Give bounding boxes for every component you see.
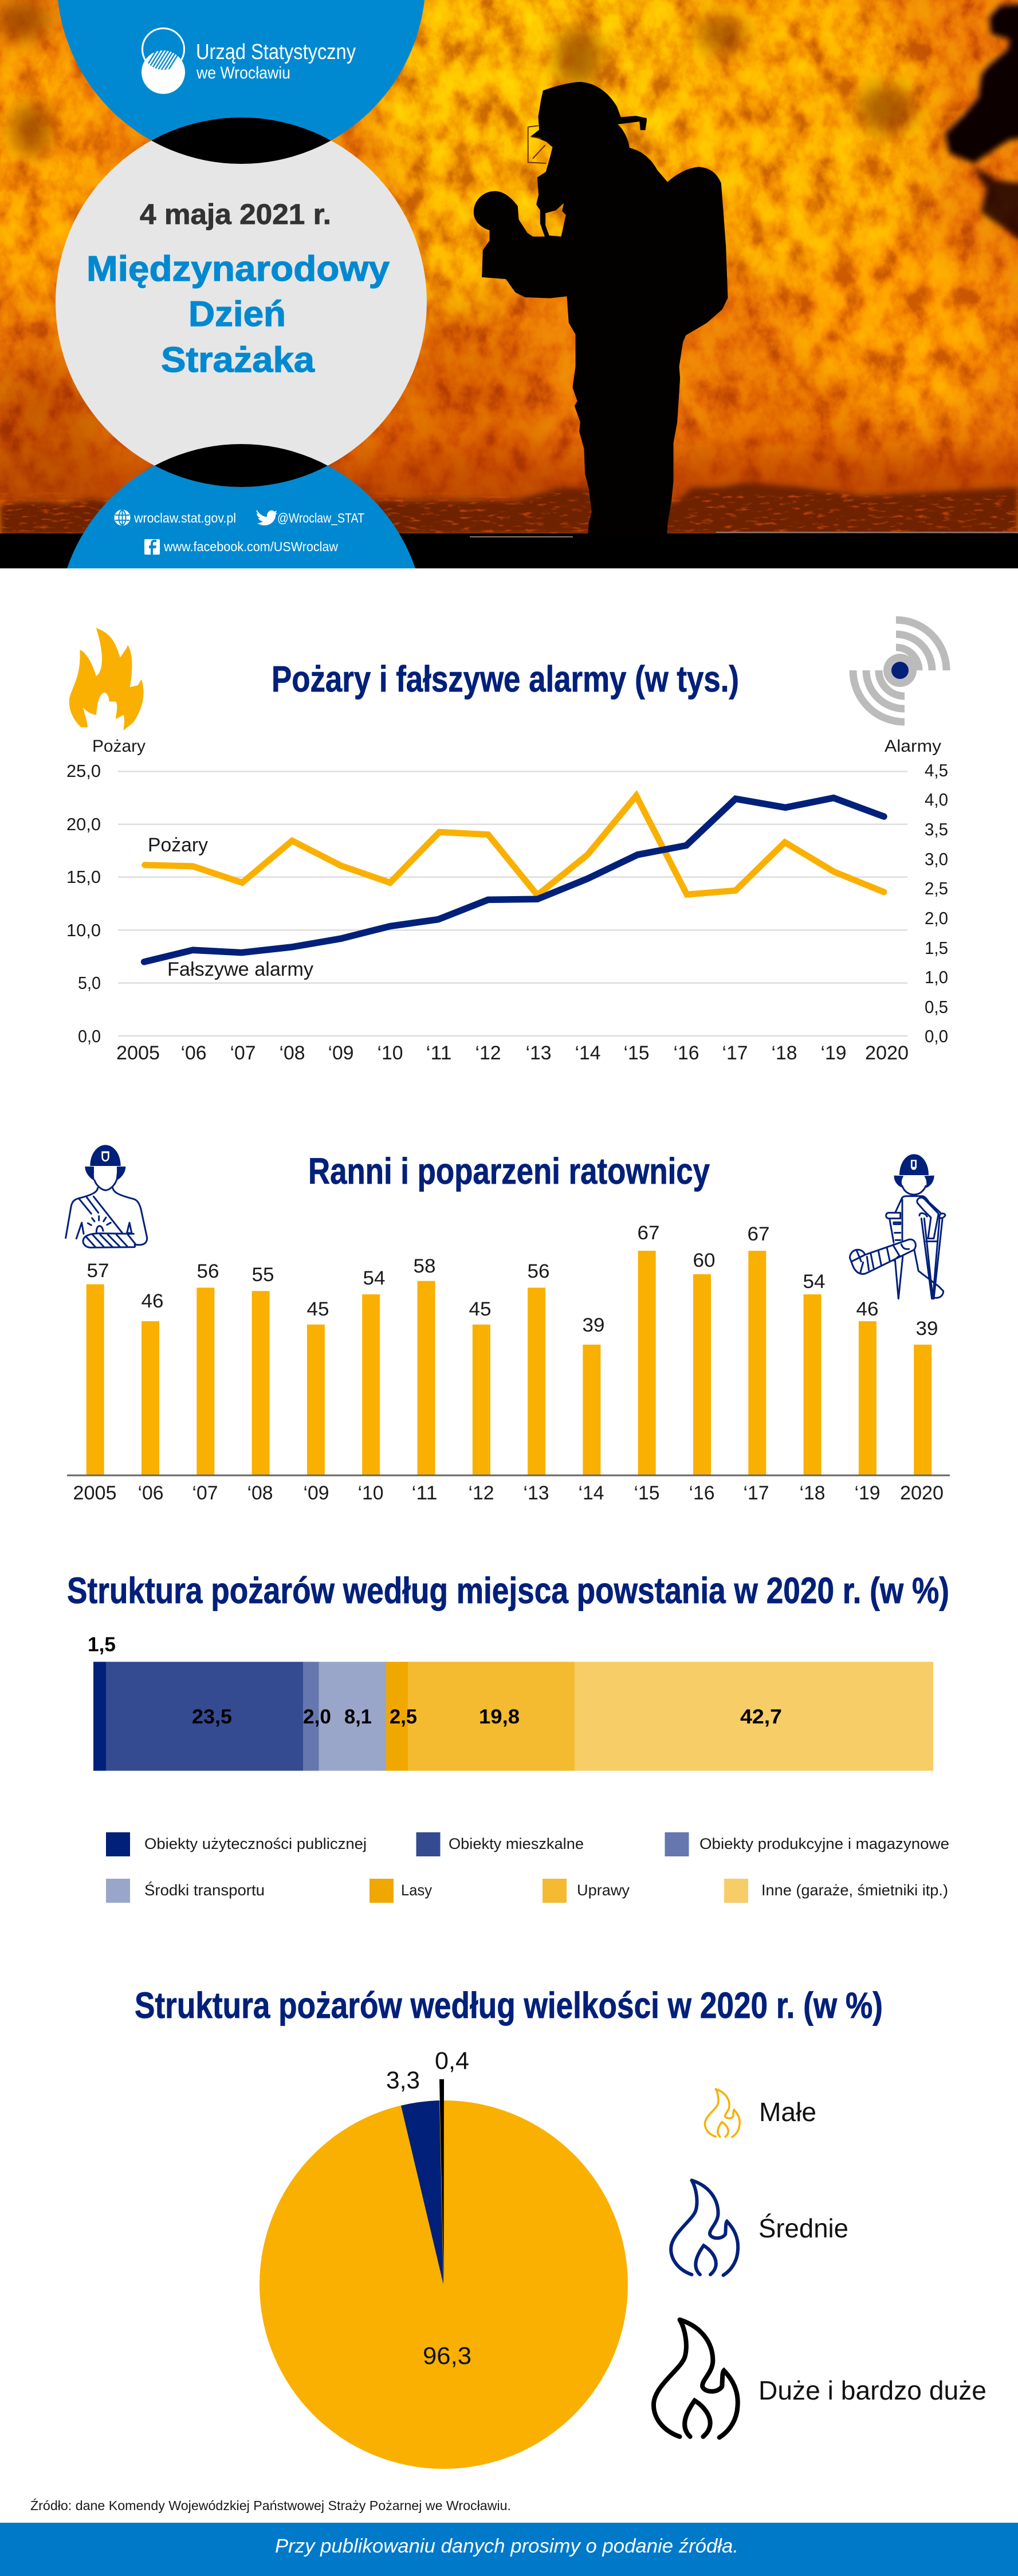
x axis labels: ‘13 [524,1482,549,1504]
x axis labels: ‘08 [280,1042,305,1064]
grey central panel [56,117,427,487]
contact links: @Wroclaw_STAT [277,511,364,525]
value labels: 58 [414,1255,435,1277]
heading: Pożary i fałszywe alarmy (w tys.) [272,658,739,700]
right axis labels: 4,5 [925,760,948,780]
heading: Struktura pożarów według wielkości w 2020 r. (w %) [135,1985,883,2026]
panel: injured rescuers [66,1145,950,1504]
pie chart: 3,3 [386,2067,420,2094]
axis captions [92,737,941,756]
x axis labels: ‘19 [820,1042,847,1064]
right crutch [919,1213,945,1299]
panel: fires by size [135,1985,986,2469]
stacked bar: 1,5 [88,1633,116,1656]
top blue circle [57,0,426,164]
right axis labels: 4,0 [925,790,948,810]
right axis labels: 3,0 [925,849,948,869]
x axis labels: ‘06 [137,1482,164,1504]
left axis labels: 15,0 [66,867,101,887]
icon: firefighter with arm sling [66,1145,147,1247]
value labels: 67 [747,1223,770,1245]
series: false alarms [144,798,884,962]
right axis labels: 2,0 [925,908,948,928]
x axis labels: ‘12 [469,1482,494,1504]
x axis labels: ‘14 [579,1482,604,1504]
value labels: 54 [803,1271,825,1293]
x axis labels: ‘12 [475,1042,501,1064]
legend: Uprawy [577,1882,630,1899]
value labels: 55 [252,1264,274,1286]
right dark smoke patch [945,3,1018,244]
burning ground [0,482,1018,568]
icon: alarm signal [853,620,946,722]
legend: Obiekty produkcyjne i magazynowe [699,1835,949,1852]
heading: Ranni i poparzeni ratownicy [308,1150,710,1192]
x axis labels: ‘07 [192,1482,218,1504]
legend label: large: Duże i bardzo duże [758,2375,986,2405]
value labels: 67 [637,1222,660,1244]
legend: Obiekty mieszkalne [449,1835,584,1852]
logo: Urząd Statystyczny we Wrocławiu: we Wrocławiu [196,64,290,83]
left axis labels: 20,0 [66,814,101,834]
x axis labels: ‘17 [722,1042,748,1064]
right axis labels: 0,0 [925,1026,948,1046]
logo: Urząd Statystyczny we Wrocławiu [142,29,356,94]
legend label: small: Małe [759,2097,816,2127]
line chart [66,760,948,1064]
series label: fires: Pożary [148,834,208,856]
source note: Źródło: dane Komendy Wojewódzkiej Państwowej Straży Pożarnej we Wrocławiu. [30,2498,511,2513]
contact links: wroclaw.stat.gov.pl [133,511,236,525]
x axis labels: ‘10 [357,1482,384,1504]
icon: firefighter on crutches [850,1154,945,1299]
legend label: medium: Średnie [758,2213,848,2243]
header title: Międzynarodowy [87,249,390,289]
x axis labels [73,1482,944,1504]
value labels: 39 [582,1314,605,1336]
x axis labels: ‘17 [744,1482,769,1504]
x axis labels: ‘16 [689,1482,715,1504]
right axis labels: 1,0 [925,967,948,987]
cast [850,1239,915,1274]
value labels: 60 [693,1250,715,1271]
x axis labels: ‘07 [230,1042,256,1064]
value labels: 45 [307,1298,329,1320]
x axis labels: ‘14 [575,1042,600,1064]
icon: large flame [654,2320,738,2437]
stacked bar: 2,5 [390,1706,417,1728]
bar chart [67,1222,950,1504]
right axis labels: 2,5 [925,878,948,898]
right axis labels: 3,5 [925,819,948,839]
legend: Środki transportu [144,1880,265,1899]
x axis labels: ‘18 [800,1482,825,1504]
pie chart: 96,3 [423,2342,471,2370]
legend: Inne (garaże, śmietniki itp.) [761,1882,948,1899]
value labels: 46 [141,1290,164,1312]
x axis labels: ‘11 [426,1042,451,1064]
axis captions: Alarmy [885,737,941,756]
right axis labels [925,760,948,1046]
x axis labels: 2005 [73,1482,117,1504]
x axis labels: ‘18 [771,1042,797,1064]
stacked bar: 8,1 [344,1706,372,1728]
panel: fires and false alarms [66,620,948,1064]
value labels: 39 [915,1318,938,1340]
left axis labels: 10,0 [66,920,101,940]
x axis labels: ‘08 [247,1482,273,1504]
flame texture [0,0,1018,568]
x axis labels: ‘11 [411,1482,438,1504]
x axis labels: ‘09 [304,1482,329,1504]
axis captions: Pożary [92,737,146,756]
value labels: 54 [363,1267,385,1289]
x axis labels: ‘06 [181,1042,206,1064]
bottom blue circle [67,444,415,568]
header photo: firefighter against flames [0,0,1018,568]
right axis labels: 0,5 [925,997,948,1017]
series label: false alarms: Fałszywe alarmy [167,959,313,980]
x axis labels: ‘13 [526,1042,551,1064]
value labels: 46 [856,1298,879,1320]
panel: fires by place of origin [67,1570,949,1903]
x axis labels: 2005 [116,1042,160,1064]
left axis labels: 25,0 [66,761,101,781]
silhouette of firefighter [474,82,728,537]
x axis labels: ‘10 [377,1042,403,1064]
value labels: 56 [197,1260,219,1282]
bars [87,1251,931,1475]
value labels: 56 [527,1260,550,1282]
x axis labels: ‘19 [855,1482,880,1504]
pie chart: 0,4 [435,2047,469,2075]
header title: Strażaka [161,340,315,380]
left axis labels: 0,0 [78,1026,101,1046]
left axis labels: 5,0 [78,973,101,993]
header date: 4 maja 2021 r. [140,198,331,230]
logo: Urząd Statystyczny we Wrocławiu: Urząd Statystyczny [196,40,356,64]
x axis labels: 2020 [865,1042,909,1064]
footer banner [0,2523,1018,2576]
stacked bar: 23,5 [192,1706,232,1728]
series: fires [145,796,884,895]
black overlap lenses [151,117,331,487]
x axis labels: ‘15 [623,1042,650,1064]
logo mark [142,29,185,94]
legend: Lasy [401,1882,432,1899]
x axis labels: ‘15 [634,1482,660,1504]
icon: twitter bird [257,510,277,525]
legend [106,1832,949,1903]
footer banner: Przy publikowaniu danych prosimy o podanie źródła. [275,2535,738,2557]
icon: flame [69,628,144,731]
stacked bar: 2,0 [303,1706,331,1728]
header title [87,249,390,380]
icon: facebook [144,539,160,555]
stacked bar: 19,8 [479,1706,520,1728]
icon: medium flame [671,2180,738,2275]
header title: Dzień [188,294,286,334]
x axis labels [116,1042,909,1064]
value labels [87,1222,938,1340]
mask frame detail [528,125,546,163]
icon: small flame [705,2089,740,2137]
icon: globe [115,510,129,525]
stacked bar [88,1633,933,1771]
contact links: www.facebook.com/USWroclaw [163,539,338,554]
right axis labels: 1,5 [925,938,948,958]
left axis labels [66,761,101,1046]
value labels: 45 [469,1298,492,1320]
contact links [115,510,364,555]
left crutch [886,1213,903,1299]
x axis labels: 2020 [900,1482,944,1504]
pie chart [260,2047,628,2469]
value labels: 57 [87,1260,109,1282]
x axis labels: ‘16 [674,1042,699,1064]
stacked bar: 42,7 [740,1706,782,1728]
x axis labels: ‘09 [328,1042,354,1064]
legend: Obiekty użyteczności publicznej [144,1835,367,1852]
